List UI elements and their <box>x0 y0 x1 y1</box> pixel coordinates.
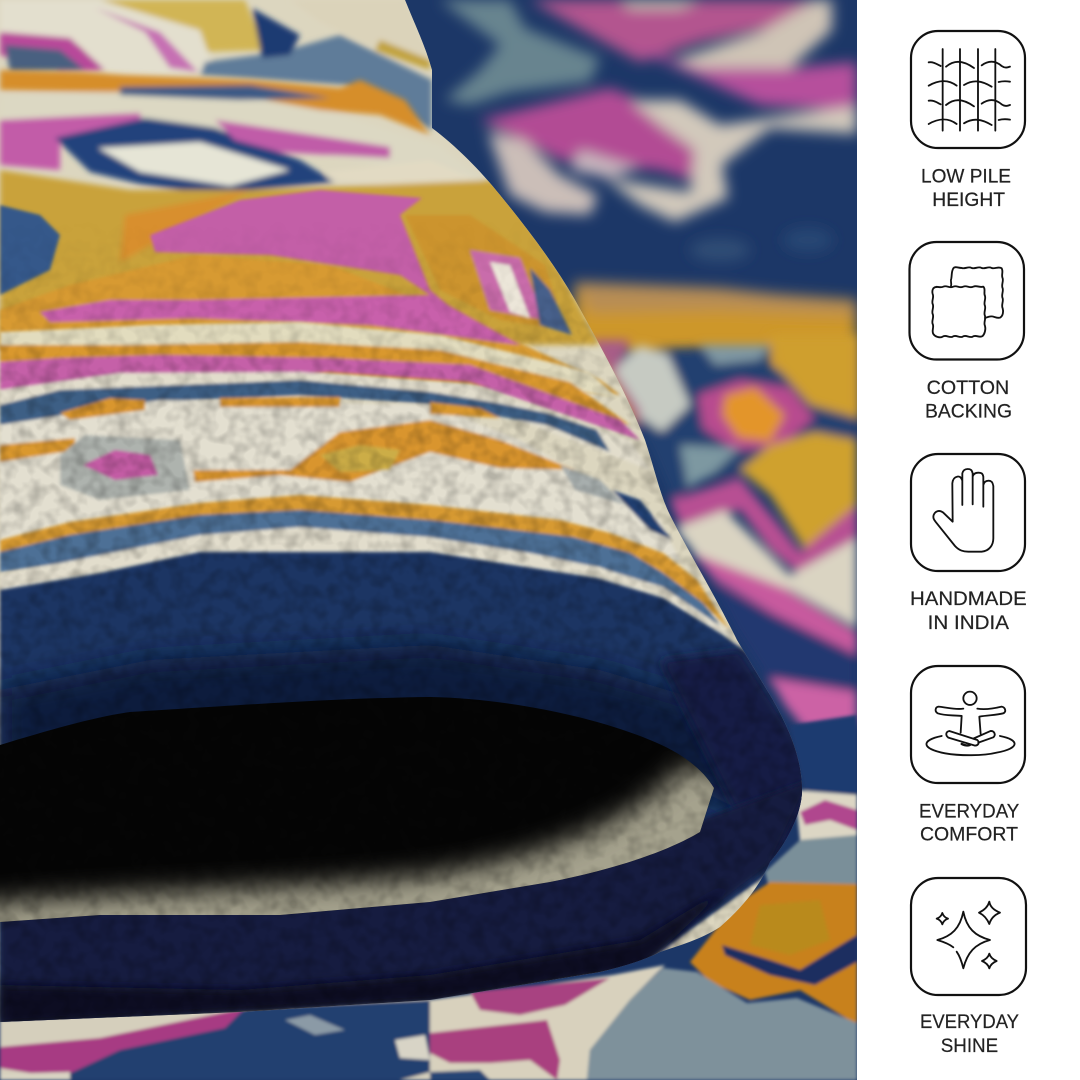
label: cotton backing: BACKING <box>925 401 1012 422</box>
label: cotton backing <box>925 378 1012 422</box>
label: handmade in India: IN INDIA <box>928 613 1009 634</box>
cream, orange, pink and blue horizontal stripes <box>0 322 680 560</box>
label: cotton backing: COTTON <box>927 378 1009 399</box>
label: low pile height: HEIGHT <box>932 190 1005 211</box>
label: everyday comfort <box>919 801 1020 846</box>
feature: low pile height <box>911 31 1025 211</box>
upper pattern section <box>0 0 432 130</box>
blurred rug pattern behind the roll: navy field and yellow band <box>575 228 857 420</box>
orange, blue and cream stripes above navy edge <box>0 495 735 636</box>
blurred rug pattern behind the roll: top right <box>440 0 857 222</box>
rolled rug body <box>0 0 802 1022</box>
icon: hand <box>911 454 1025 571</box>
label: everyday comfort: COMFORT <box>920 825 1018 846</box>
label: everyday shine: SHINE <box>941 1036 998 1057</box>
white features column <box>857 0 1080 1080</box>
label: everyday shine <box>920 1012 1019 1057</box>
yarn texture on the roll <box>0 259 798 1020</box>
label: low pile height: LOW PILE <box>921 167 1011 188</box>
blurred rug pattern behind the roll: medallion <box>590 335 857 730</box>
lower right rug pattern <box>0 715 857 1080</box>
label: everyday comfort: EVERYDAY <box>919 801 1020 822</box>
large pink motif and navy semicircle <box>0 190 620 395</box>
navy binding edge <box>0 552 810 1025</box>
feature: everyday shine <box>911 878 1026 1057</box>
label: handmade in India: HANDMADE <box>910 589 1027 610</box>
label: everyday shine: EVERYDAY <box>920 1012 1019 1033</box>
feature: everyday comfort <box>911 666 1025 846</box>
label: handmade in India <box>910 589 1027 634</box>
top orange stripes and navy shapes <box>0 70 600 345</box>
icon: sparkles <box>911 878 1026 995</box>
cavity and cotton backing lining <box>0 697 714 922</box>
feature: handmade in India <box>910 454 1027 634</box>
icon: cotton swatches <box>910 242 1024 360</box>
icon: seated meditation figure <box>911 666 1025 783</box>
panel: rolled rug photo <box>0 0 857 1080</box>
icon: low pile fibers <box>911 31 1025 148</box>
feature: cotton backing <box>910 242 1024 422</box>
label: low pile height <box>921 167 1011 211</box>
